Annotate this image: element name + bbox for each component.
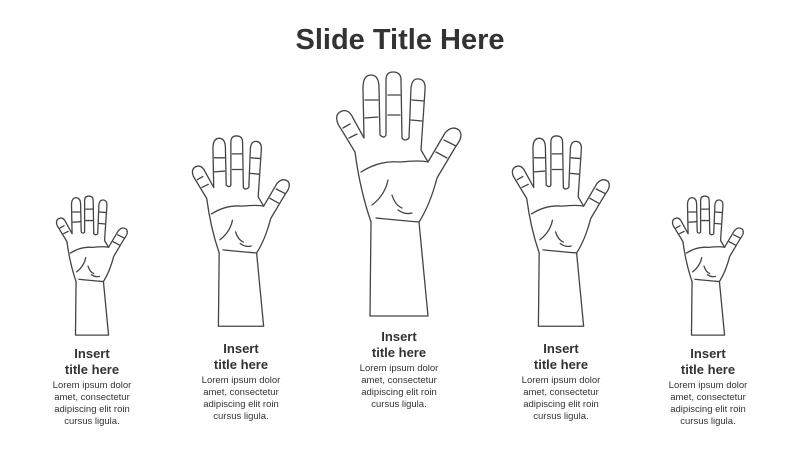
hand 1 [56,196,127,335]
text 1: title here [65,362,119,377]
hand 3 [337,72,461,316]
text 1: Insert [74,346,110,361]
text 2: title here [214,357,268,372]
text 1 [53,346,132,427]
text 3: title here [372,345,426,360]
text 5 [669,346,748,427]
text 5: title here [681,362,735,377]
text 2 [202,341,280,422]
text 1: Lorem ipsum dolor amet, consectetur adipiscing elit roin cursus ligula. [53,380,131,427]
text 3: Lorem ipsum dolor amet, consectetur adipiscing elit roin cursus ligula. [360,363,438,410]
hand 4 [512,136,609,326]
text 4 [522,341,600,422]
text 5: Lorem ipsum dolor amet, consectetur adipiscing elit roin cursus ligula. [669,380,747,427]
text 3 [360,329,438,410]
text 4: Lorem ipsum dolor amet, consectetur adipiscing elit roin cursus ligula. [522,375,600,422]
text 4: title here [534,357,588,372]
text 5: Insert [690,346,726,361]
hand 5 [672,196,743,335]
text 2: Insert [223,341,259,356]
text 4: Insert [543,341,579,356]
text 2: Lorem ipsum dolor amet, consectetur adipiscing elit roin cursus ligula. [202,375,280,422]
hand 2 [192,136,289,326]
text 3: Insert [381,329,417,344]
title: Slide Title Here [296,24,504,56]
